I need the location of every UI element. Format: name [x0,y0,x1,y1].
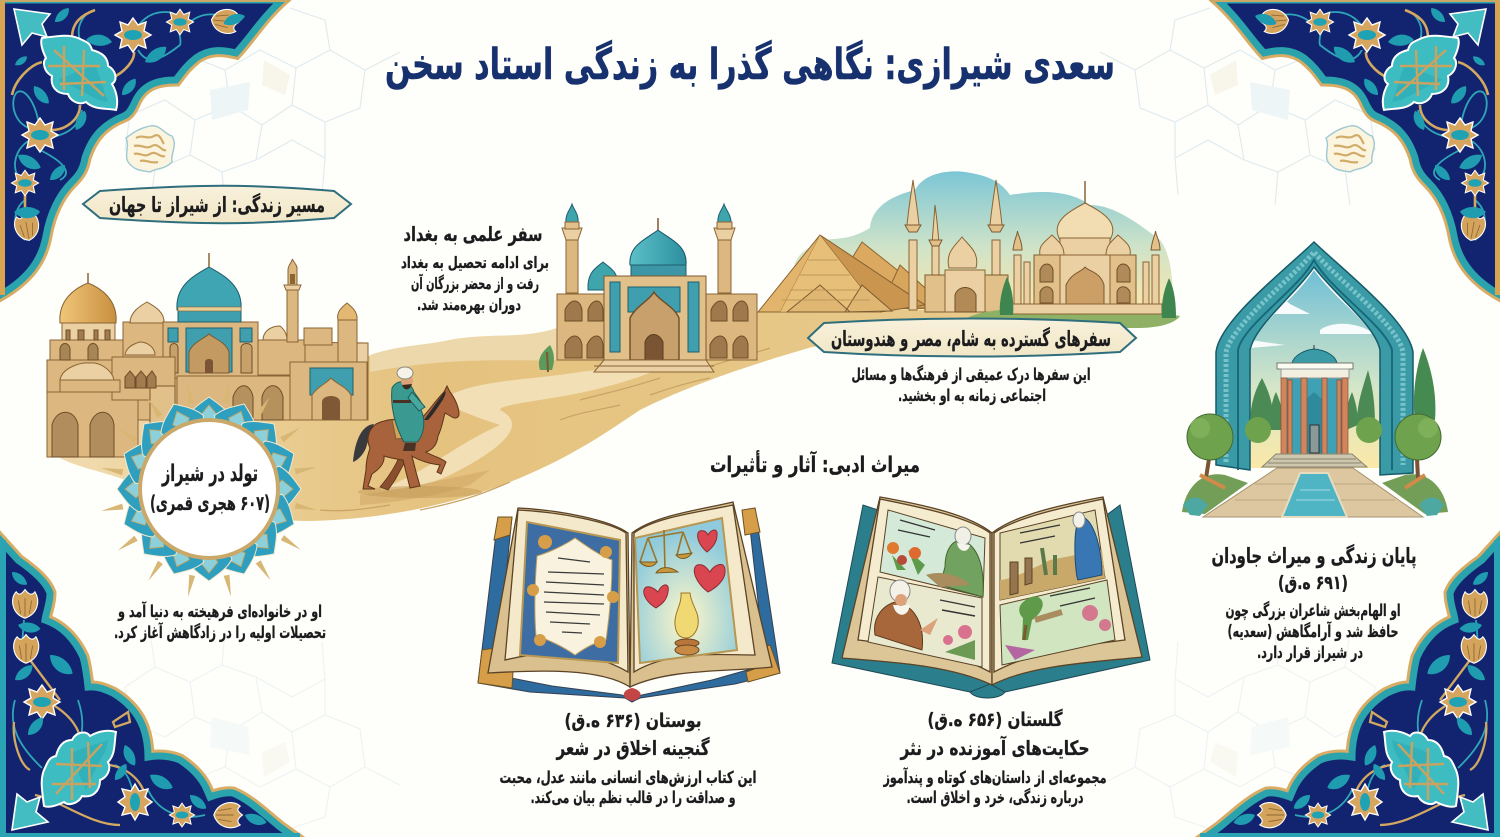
text: trip to Baghdad: سفر علمی به بغداد [404,222,542,246]
cypress trees [1000,277,1176,318]
text: trip to Baghdad: برای ادامه تحصیل به بغداد [401,253,549,272]
sky cloud [793,171,1172,310]
heading: literary legacy: میراث ادبی: آثار و تأثیرات [710,449,920,478]
illustration: Golestan book [832,497,1150,698]
text: Bustan: این کتاب ارزش‌های انسانی مانند عدل، محبت [500,768,756,788]
text: end of life: (۶۹۱ ه.ق) [1278,572,1348,594]
illustration: Syria, Egypt and India skyline [758,171,1180,328]
pyramids [758,235,947,312]
Taj Mahal [1012,181,1162,314]
text: end of life [1212,543,1416,663]
text: Golestan: درباره زندگی، خرد و اخلاق است. [906,787,1084,808]
text: trip to Baghdad: رفت و از محضر بزرگان آن [411,273,539,293]
corner ornament: bottom right [1200,540,1500,837]
text: Bustan [500,710,756,808]
medallion: born in Shiraz [100,380,318,598]
ground [966,306,1180,328]
text: Bustan: و صداقت را در قالب نظم بیان می‌کند. [530,788,736,808]
text: Golestan: گلستان (۶۵۶ ه.ق) [927,708,1063,731]
corner ornament: bottom left [0,540,300,837]
text: travels description [852,364,1090,406]
corner ornament: top right [1210,0,1500,295]
medallion: born in Shiraz: تولد در شیراز [161,461,258,487]
illustration: desert road [48,305,1000,521]
text: birth description: تحصیلات اولیه را در زادگاهش آغاز کرد. [114,621,326,643]
text: birth description: او در خانواده‌ای فرهیخته به دنیا آمد و [117,600,322,622]
text: Golestan: مجموعه‌ای از داستان‌های کوتاه و پندآموز [883,766,1106,788]
text: Bustan: گنجینه اخلاق در شعر [556,736,710,760]
text: travels description: اجتماعی زمانه به او بخشید. [898,386,1046,406]
text: end of life: حافظ شد و آرامگاهش (سعدیه) [1228,620,1398,642]
text: Golestan [883,708,1106,808]
text: birth description [114,600,326,643]
illustration: Bustan book [478,502,780,702]
text: trip to Baghdad [401,222,549,314]
text: end of life: او الهام‌بخش شاعران بزرگی چون [1226,600,1400,621]
text: end of life: در شیراز قرار دارد. [1257,643,1363,663]
text: Bustan: بوستان (۶۳۶ ه.ق) [564,710,702,732]
text: Golestan: حکایت‌های آموزنده در نثر [900,735,1090,760]
text: trip to Baghdad: دوران بهره‌مند شد. [417,295,521,314]
text: end of life: پایان زندگی و میراث جاودان [1212,543,1416,568]
banner: life path [83,186,351,223]
illustration: horse and rider [353,367,482,498]
corner ornament: top left [0,0,290,295]
banner: wide travels [808,318,1136,356]
illustration: Baghdad mosque [539,204,757,372]
Cairo mosque [905,180,1008,312]
title: سعدی شیرازی: نگاهی گذرا به زندگی استاد سخن [385,39,1115,90]
banner: life path: مسیر زندگی: از شیراز تا جهان [109,192,325,217]
illustration: Saadi tomb [1182,242,1448,517]
text: travels description: این سفرها درک عمیقی از فرهنگ‌ها و مسائل [852,364,1090,385]
banner: wide travels: سفرهای گسترده به شام، مصر و هندوستان [831,326,1111,351]
illustration: Shiraz city [47,253,368,457]
medallion: born in Shiraz: (۶۰۷ هجری قمری) [150,491,270,515]
